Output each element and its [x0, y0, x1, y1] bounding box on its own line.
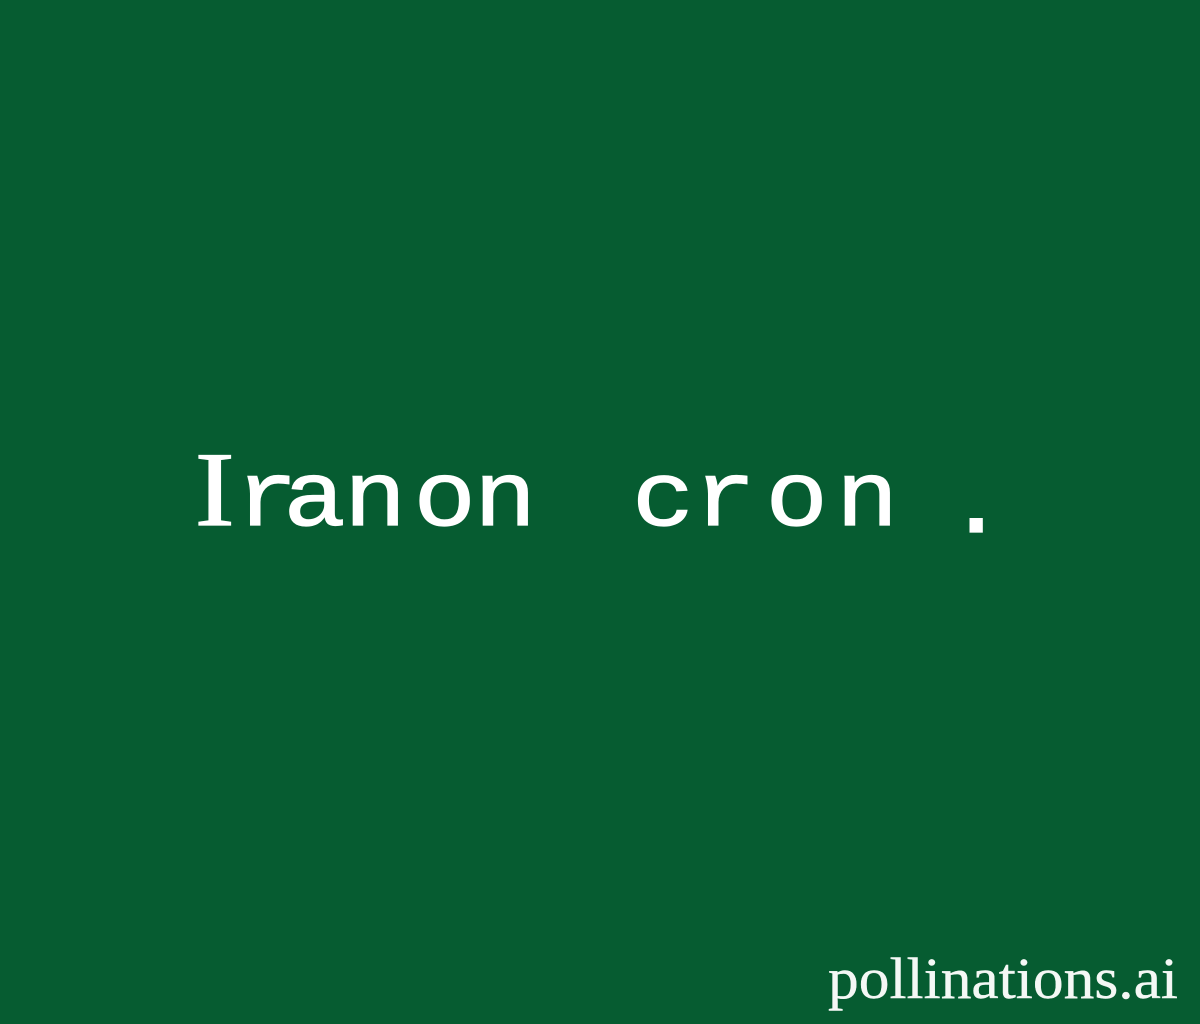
title: I — [195, 431, 235, 548]
title: . — [945, 456, 1007, 560]
title: a — [283, 449, 346, 553]
title: o — [413, 449, 476, 553]
title: n — [474, 449, 536, 553]
title: r — [694, 449, 756, 553]
title — [195, 431, 1007, 560]
title: n — [344, 449, 406, 553]
title: n — [836, 449, 898, 553]
title: c — [632, 449, 694, 553]
watermark: pollinations.ai: pollinations.ai — [828, 946, 1178, 1011]
title: o — [765, 449, 828, 553]
title: r — [236, 449, 298, 553]
